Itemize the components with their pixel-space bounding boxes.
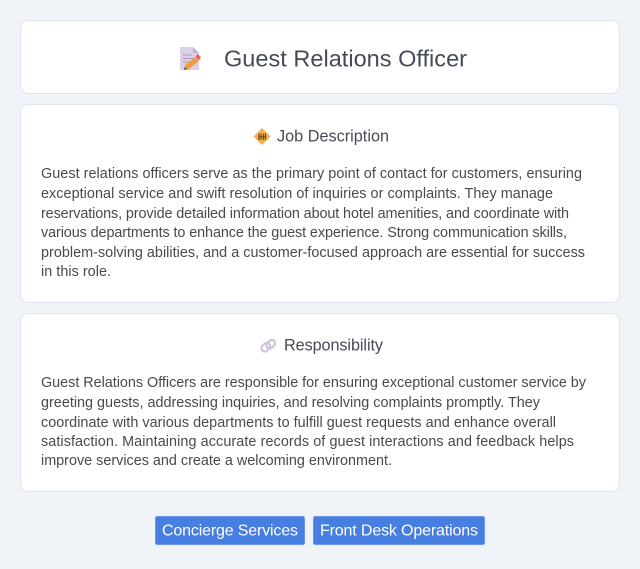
text block: responsibility: Guest Relations Officers are responsible for ensuring exceptional customer service by [41,375,587,391]
text block: responsibility: greeting guests, addressing inquiries, and resolving complaints promptly. They [41,395,541,411]
text block: job description: problem-solving abilities, and a customer-focused approach are essential for success [41,245,585,261]
button: Concierge Services [155,516,305,545]
icon: chain link [260,339,276,353]
panel: responsibility [20,314,620,492]
text block: job description: various departments to enhance the guest experience. Strong communication skills, [41,225,567,241]
text block: responsibility [41,375,587,469]
button: Front Desk Operations [313,516,485,545]
text block: job description: in this role. [41,264,111,280]
panel: title card [20,20,620,94]
button: Front Desk Operations: Front Desk Operations [320,522,478,540]
heading: job description: Job Description [277,128,389,146]
text block: responsibility: satisfaction. Maintaining accurate records of guest interactions and feedback helps [41,434,574,450]
text block: job description [41,166,585,280]
text block: responsibility: improve services and create a welcoming environment. [41,453,392,469]
text block: job description: reservations, provide detailed information about hotel amenities, and coordinate with [41,206,569,222]
text block: job description: Guest relations officers serve as the primary point of contact for customers, ensuring [41,166,582,182]
text block: job description: exceptional service and swift resolution of inquiries or complaints. They manage [41,186,553,202]
icon: orange diamond sign [254,129,270,144]
heading: responsibility: Responsibility [284,336,384,354]
title: Guest Relations Officer [224,46,467,72]
text block: responsibility: coordinate with various departments to fulfill guest requests and enhance overall [41,415,556,431]
panel: job description [20,104,620,302]
icon: document with pencil [180,47,201,70]
button: Concierge Services: Concierge Services [162,522,298,540]
